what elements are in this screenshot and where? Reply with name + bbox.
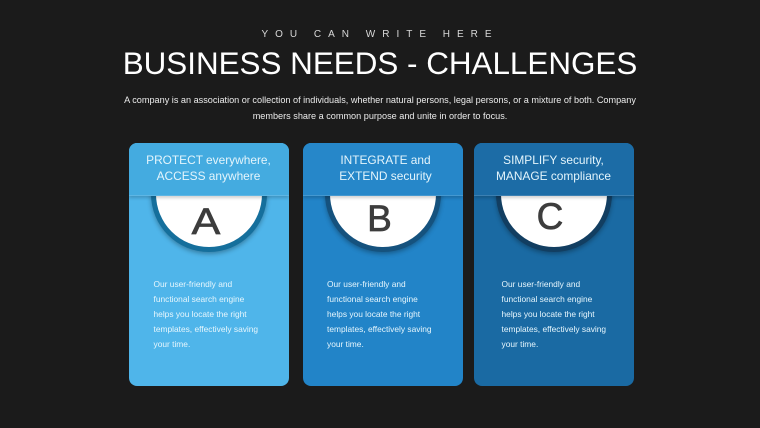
body text B: Our user-friendly and	[327, 279, 406, 289]
panel: card A	[128, 143, 288, 386]
body text A: Our user-friendly and	[154, 279, 232, 289]
body text C	[502, 279, 606, 349]
disc B	[330, 141, 436, 247]
heading B: INTEGRATE and	[340, 152, 431, 166]
intro paragraph: A company is an association or collection of individuals, whether natural persons, legal persons, or a mixture of both. Company	[124, 95, 636, 105]
heading A: PROTECT everywhere,	[146, 152, 271, 166]
body text C: functional search engine	[502, 294, 592, 304]
panel: card C	[474, 143, 634, 386]
ring C	[496, 136, 612, 252]
body text C: templates, effectively saving	[502, 324, 606, 334]
body text B: templates, effectively saving	[327, 324, 432, 334]
body text A: functional search engine	[154, 294, 244, 304]
body text B: your time.	[327, 339, 364, 349]
header C	[474, 143, 634, 196]
intro paragraph: members share a common purpose and unite in order to focus.	[253, 111, 507, 121]
heading B	[339, 152, 432, 182]
body text C: Our user-friendly and	[502, 279, 580, 289]
body text B: helps you locate the right	[327, 309, 420, 319]
body text A: your time.	[154, 339, 190, 349]
letter B: B	[367, 198, 392, 239]
ring B	[325, 136, 441, 252]
heading C: MANAGE compliance	[496, 168, 611, 182]
intro paragraph	[124, 95, 636, 121]
title: BUSINESS NEEDS - CHALLENGES	[123, 46, 637, 81]
letter A: A	[192, 201, 220, 242]
body text C: helps you locate the right	[502, 309, 595, 319]
panel: card B	[302, 143, 462, 386]
heading C	[496, 152, 611, 182]
body text B	[327, 279, 432, 349]
body text C: your time.	[502, 339, 538, 349]
eyebrow text: YOU CAN WRITE HERE	[261, 29, 499, 40]
body text A	[154, 279, 258, 349]
disc C	[500, 141, 606, 247]
body text A: helps you locate the right	[154, 309, 247, 319]
ring A	[150, 136, 266, 252]
header A	[128, 143, 288, 196]
disc A	[156, 141, 262, 247]
heading B: EXTEND security	[339, 168, 432, 182]
header B	[302, 143, 462, 196]
heading C: SIMPLIFY security,	[503, 152, 604, 166]
body text A: templates, effectively saving	[154, 324, 258, 334]
body text B: functional search engine	[327, 294, 418, 304]
letter C: C	[537, 196, 563, 237]
heading A	[146, 152, 271, 182]
heading A: ACCESS anywhere	[157, 168, 260, 182]
